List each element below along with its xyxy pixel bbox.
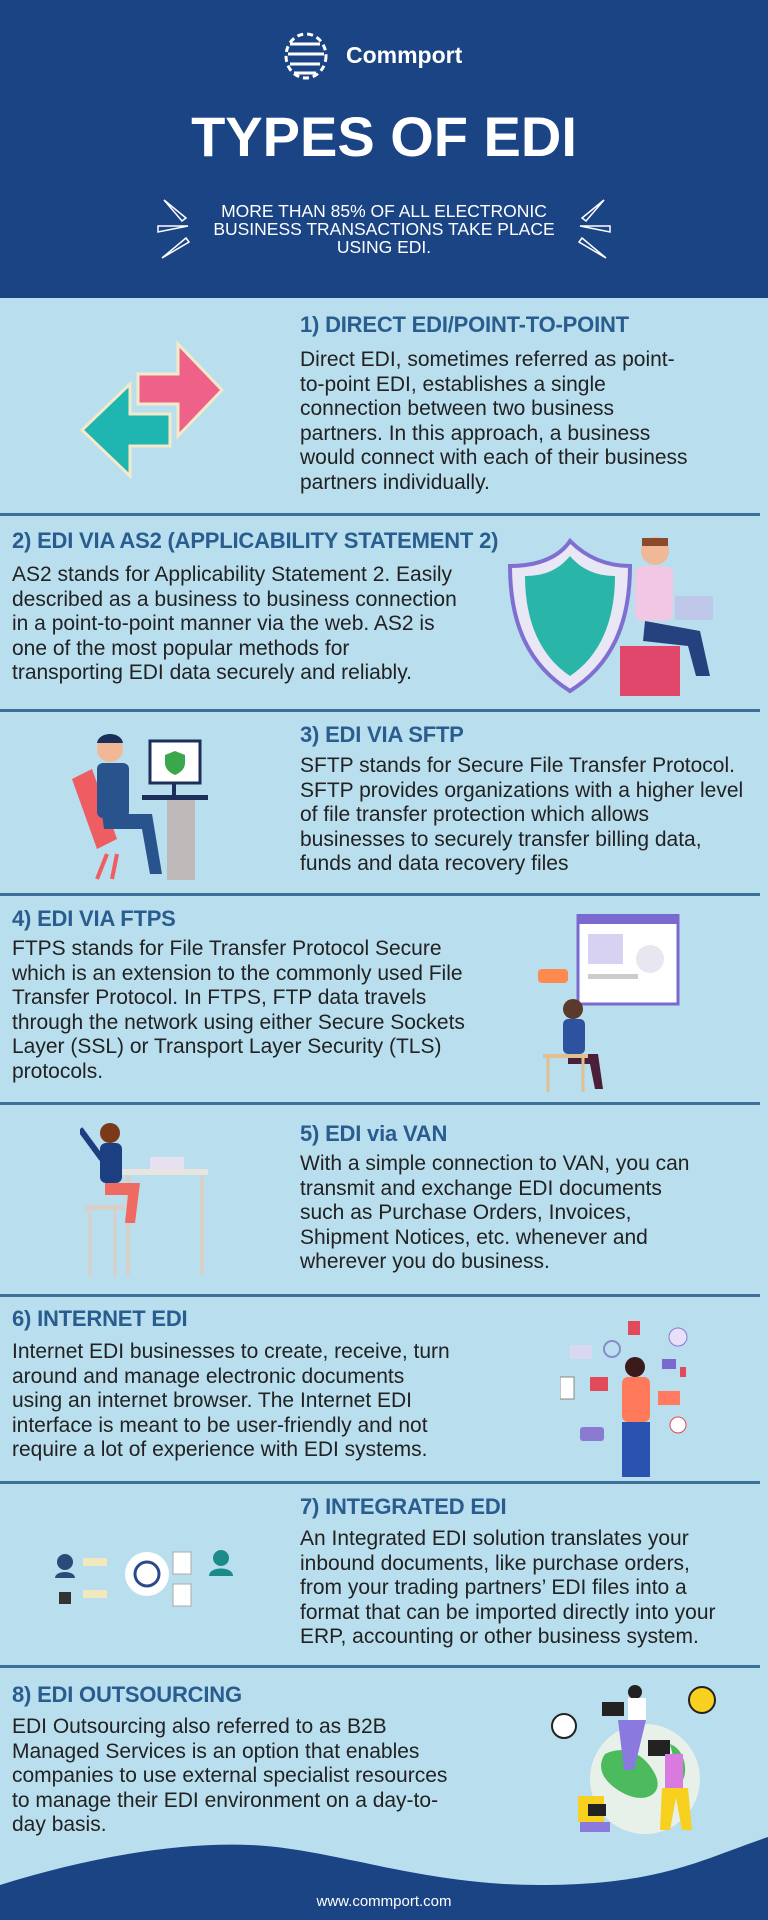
icon: person at desk [80, 1123, 208, 1277]
heading 3: 3) EDI VIA SFTP [300, 722, 464, 747]
body 6 [12, 1340, 450, 1461]
body 8: day basis. [12, 1813, 107, 1836]
body 2: in a point-to-point manner via the web. AS2 is [12, 612, 435, 635]
body 1: connection between two business [300, 397, 614, 420]
title: TYPES OF EDI [191, 105, 577, 168]
body 4: protocols. [12, 1060, 103, 1083]
body 7: inbound documents, like purchase orders, [300, 1552, 690, 1575]
body 1: to-point EDI, establishes a single [300, 373, 606, 396]
heading 1: 1) DIRECT EDI/POINT-TO-POINT [300, 312, 629, 337]
body 8 [12, 1715, 447, 1836]
icon: person with web icons [560, 1321, 688, 1477]
heading 7: 7) INTEGRATED EDI [300, 1494, 506, 1519]
body 2 [12, 563, 457, 684]
icon: arrows [80, 340, 224, 480]
logo: Commport [346, 42, 462, 68]
heading 5: 5) EDI via VAN [300, 1121, 447, 1146]
section 7 [55, 1494, 716, 1648]
icon: people around globe [551, 1685, 716, 1834]
body 5: such as Purchase Orders, Invoices, [300, 1201, 631, 1224]
subtitle callout: MORE THAN 85% OF ALL ELECTRONIC [221, 201, 547, 221]
body 1: Direct EDI, sometimes referred as point- [300, 348, 675, 371]
body 3 [300, 754, 743, 875]
body 8: to manage their EDI environment on a day-to- [12, 1789, 438, 1812]
body 8: EDI Outsourcing also referred to as B2B [12, 1715, 387, 1738]
body 1: partners individually. [300, 471, 490, 494]
section 1 [80, 312, 688, 494]
body 5: With a simple connection to VAN, you can [300, 1152, 689, 1175]
section 8 [12, 1682, 716, 1836]
body 3: funds and data recovery files [300, 852, 568, 875]
body 2: described as a business to business connection [12, 588, 457, 611]
body 2: one of the most popular methods for [12, 637, 349, 660]
section 5 [80, 1121, 689, 1277]
body 4: Transfer Protocol. In FTPS, FTP data travels [12, 986, 426, 1009]
body 7: An Integrated EDI solution translates your [300, 1527, 689, 1550]
body 4: FTPS stands for File Transfer Protocol Secure [12, 937, 442, 960]
body 3: SFTP provides organizations with a higher level [300, 779, 743, 802]
body 1: partners. In this approach, a business [300, 422, 650, 445]
heading 8: 8) EDI OUTSOURCING [12, 1682, 242, 1707]
subtitle callout [157, 199, 611, 259]
body 6: Internet EDI businesses to create, receive, turn [12, 1340, 450, 1363]
icon: integration diagram [55, 1550, 233, 1606]
body 2: transporting EDI data securely and reliably. [12, 661, 412, 684]
body 4 [12, 937, 465, 1083]
heading 2: 2) EDI VIA AS2 (APPLICABILITY STATEMENT 2) [12, 528, 498, 553]
header [0, 0, 768, 298]
icon: shield and person [508, 537, 713, 696]
section 2 [12, 528, 713, 696]
section 3 [72, 722, 743, 880]
body 3: businesses to securely transfer billing data, [300, 828, 702, 851]
body 8: companies to use external specialist resources [12, 1764, 447, 1787]
section 6 [12, 1306, 688, 1477]
body 2: AS2 stands for Applicability Statement 2. Easily [12, 563, 452, 586]
body 5 [300, 1152, 689, 1273]
body 6: interface is meant to be user-friendly and not [12, 1414, 428, 1437]
body 3: of file transfer protection which allows [300, 803, 649, 826]
icon: person at computer [72, 734, 208, 880]
body 8: Managed Services is an option that enables [12, 1740, 419, 1763]
logo [284, 32, 462, 80]
body 3: SFTP stands for Secure File Transfer Protocol. [300, 754, 735, 777]
body 5: Shipment Notices, etc. whenever and [300, 1226, 648, 1249]
subtitle callout: USING EDI. [337, 237, 431, 257]
icon: person with web page [538, 914, 680, 1092]
body 4: through the network using either Secure Sockets [12, 1011, 465, 1034]
footer wave [0, 1837, 768, 1920]
body 5: wherever you do business. [300, 1250, 550, 1273]
footer url: www.commport.com [316, 1893, 452, 1910]
heading 6: 6) INTERNET EDI [12, 1306, 187, 1331]
section 4 [12, 906, 680, 1092]
body 6: require a lot of experience with EDI systems. [12, 1438, 428, 1461]
body 6: using an internet browser. The Internet EDI [12, 1389, 412, 1412]
body 7: format that can be imported directly into your [300, 1601, 716, 1624]
body 1: would connect with each of their business [300, 446, 688, 469]
body 4: Layer (SSL) or Transport Layer Security (TLS) [12, 1035, 442, 1058]
body 7: ERP, accounting or other business system. [300, 1625, 699, 1648]
body 1 [300, 348, 688, 494]
body 7: from your trading partners’ EDI files into a [300, 1576, 687, 1599]
body 7 [300, 1527, 716, 1648]
body 4: which is an extension to the commonly used File [12, 962, 463, 985]
body 5: transmit and exchange EDI documents [300, 1177, 662, 1200]
subtitle callout: BUSINESS TRANSACTIONS TAKE PLACE [213, 219, 555, 239]
heading 4: 4) EDI VIA FTPS [12, 906, 176, 931]
body 6: around and manage electronic documents [12, 1365, 404, 1388]
